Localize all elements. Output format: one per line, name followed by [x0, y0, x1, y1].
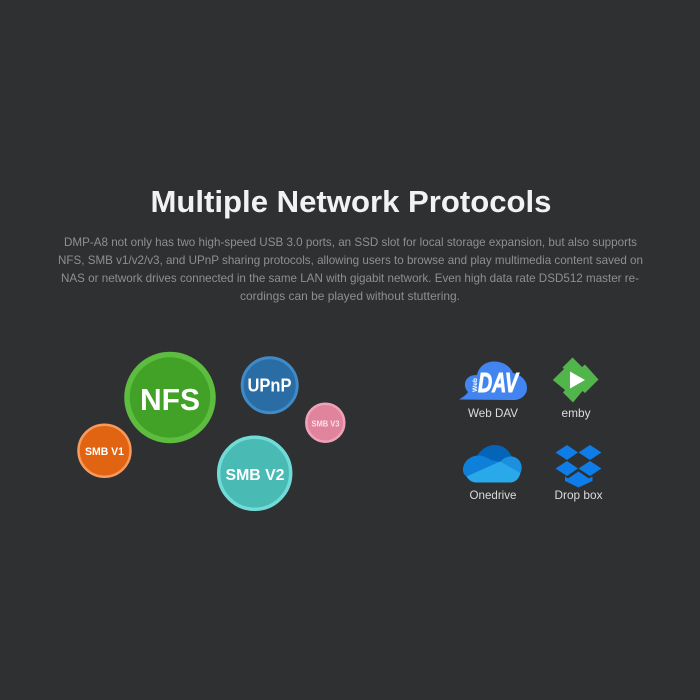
icon: Web DAV cloud: DAV [478, 367, 520, 398]
protocol bubbles [78, 354, 344, 509]
bubble: SMB V1: SMB V1 [85, 446, 124, 458]
icon: emby [553, 358, 598, 402]
bubble: SMB V3 [306, 404, 344, 442]
icon: Web DAV cloud: Web [472, 378, 479, 392]
bubble: SMB V2 [219, 437, 291, 509]
description text: DMP-A8 not only has two high-speed USB 3.0 ports, an SSD slot for local storage expansion, but also supports [64, 235, 637, 249]
bubble: UPnP: UPnP [248, 376, 292, 396]
label: emby: emby [562, 406, 590, 420]
icon: Web DAV cloud [459, 362, 527, 400]
label: Drop box: Drop box [554, 488, 602, 502]
bubble: NFS [127, 354, 213, 440]
title: Multiple Network Protocols [150, 184, 552, 219]
icon: Drop box [556, 445, 602, 488]
bubble: SMB V2: SMB V2 [226, 467, 285, 484]
description text: NAS or network drives connected in the same LAN with gigabit network. Even high data rate DSD512 master re- [61, 271, 639, 285]
icon: Onedrive cloud [463, 445, 522, 482]
bubble: UPnP [242, 358, 297, 413]
description text: cordings can be played without stuttering. [240, 289, 460, 303]
bubble: SMB V3: SMB V3 [312, 420, 340, 428]
description text: NFS, SMB v1/v2/v3, and UPnP sharing protocols, allowing users to browse and play multimedia content saved on [58, 253, 643, 267]
label: Web DAV: Web DAV [468, 406, 518, 420]
bubble: NFS: NFS [140, 382, 200, 417]
description text [58, 235, 643, 303]
label: Onedrive: Onedrive [470, 488, 517, 502]
bubble: SMB V1 [78, 425, 130, 477]
